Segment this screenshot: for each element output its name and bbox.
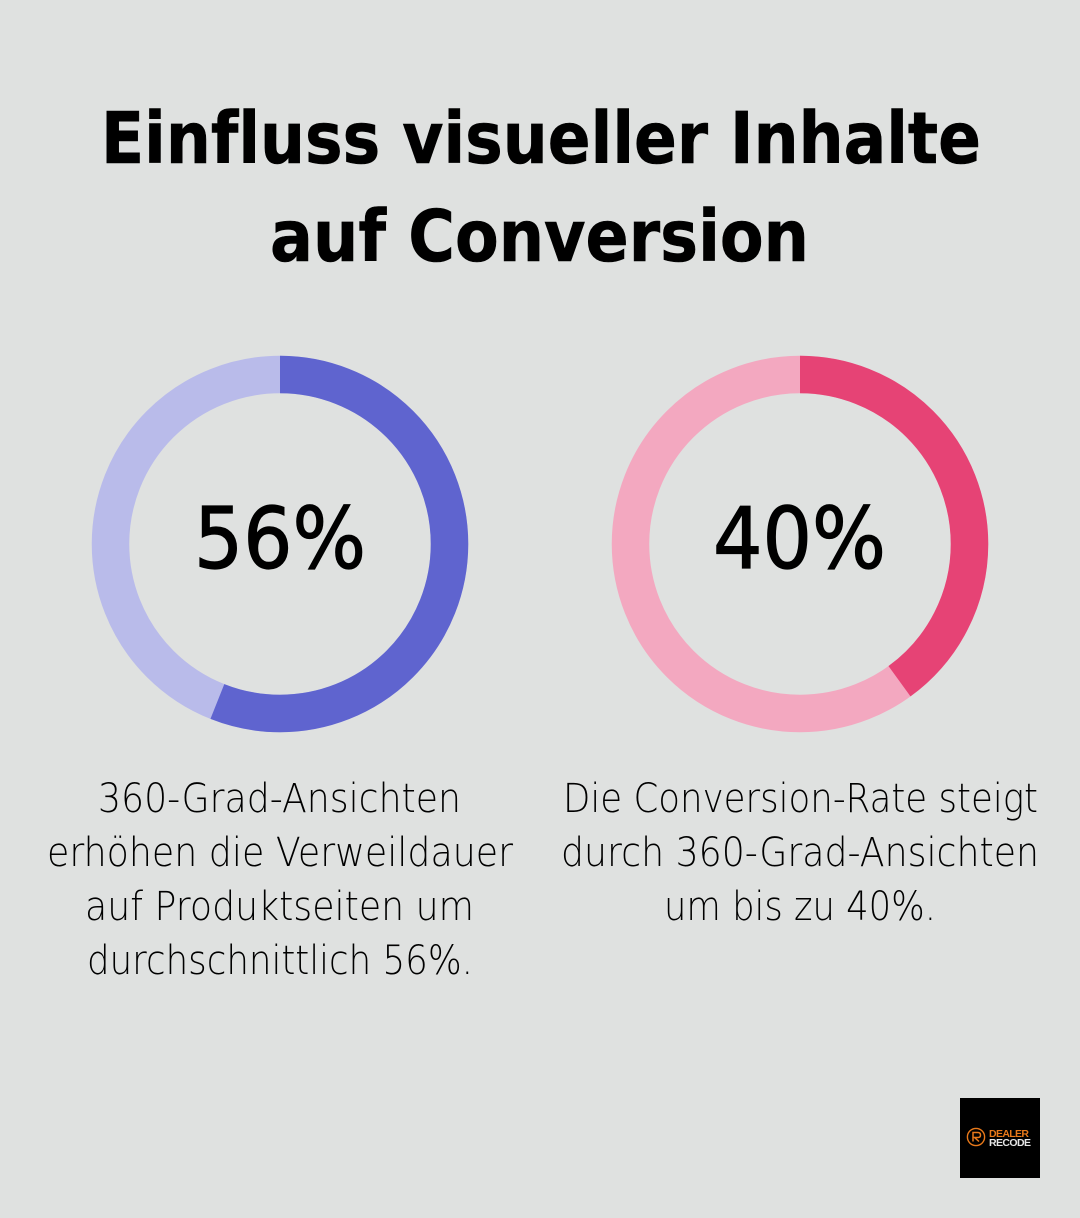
text block: 56% description: durchschnittlich 56%. <box>87 938 473 984</box>
logo: Dealer Recode: DEALER <box>989 1128 1029 1140</box>
text block: 56% description: auf Produktseiten um <box>85 884 474 930</box>
number: 40%: 40% <box>713 490 886 589</box>
title <box>101 97 981 278</box>
title: Einfluss visueller Inhalte <box>101 97 981 180</box>
logo: Dealer Recode: RECODE <box>989 1137 1031 1149</box>
text block: 40% description: um bis zu 40%. <box>664 884 936 930</box>
text block: 56% description <box>47 776 514 984</box>
text block: 40% description <box>561 776 1039 930</box>
panel: 40% statistic <box>561 374 1039 930</box>
text block: 40% description: durch 360-Grad-Ansichten <box>561 830 1039 876</box>
donut chart: 56% <box>110 374 450 714</box>
text block: 56% description: 360-Grad-Ansichten <box>98 776 461 822</box>
icon: circled R <box>967 1128 985 1146</box>
title: auf Conversion <box>270 195 809 278</box>
donut chart: 40% <box>630 374 970 714</box>
panel: 56% statistic <box>47 374 514 984</box>
number: 56%: 56% <box>194 490 366 589</box>
text block: 56% description: erhöhen die Verweildauer <box>47 830 514 876</box>
logo: Dealer Recode <box>960 1098 1040 1178</box>
